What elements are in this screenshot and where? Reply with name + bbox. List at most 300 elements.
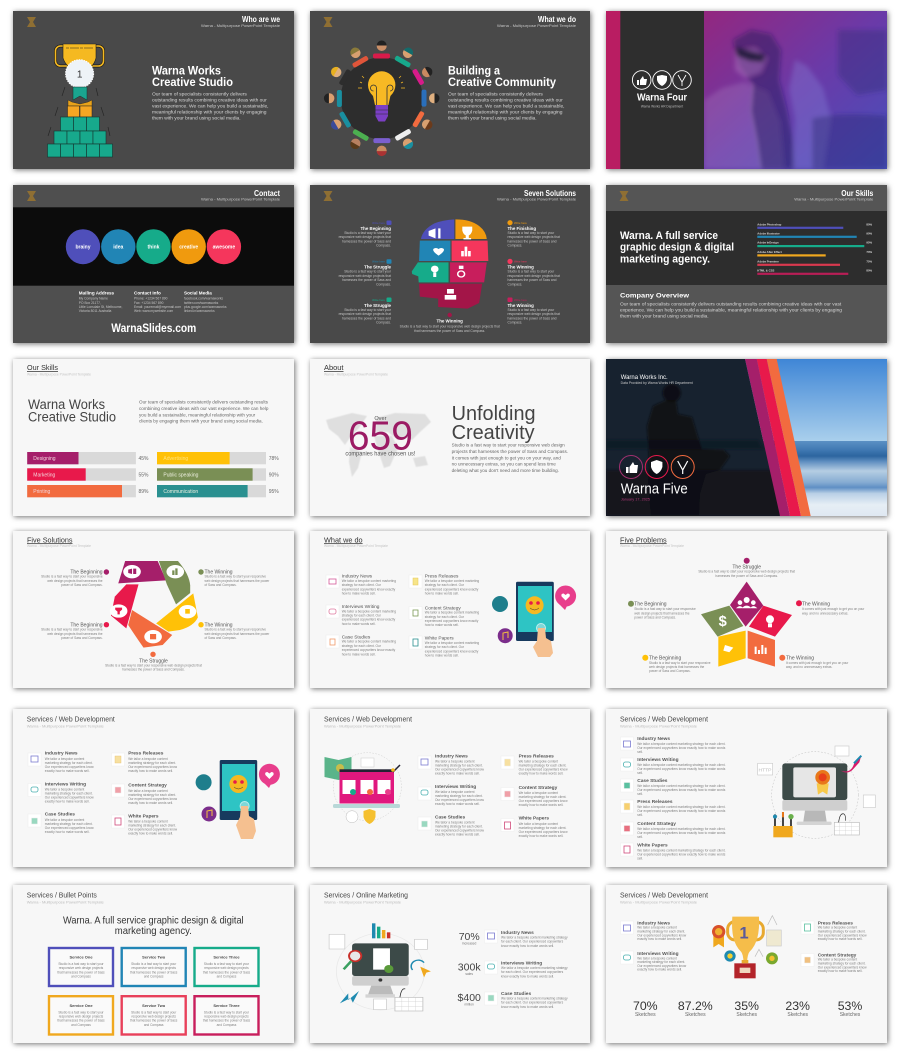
- labels: right column: harnesses the power of Sass and: [508, 278, 557, 282]
- service descriptions: We tailor a bespoke content: [45, 788, 84, 792]
- service descriptions: We tailor a bespoke content: [45, 757, 84, 761]
- service descriptions: exactly how to make words sell.: [818, 969, 863, 973]
- service box text: Studio is a fast way to start your: [204, 962, 250, 966]
- service titles: [435, 753, 558, 822]
- label: the winning bottom: The Winning: [786, 656, 814, 662]
- label: the winning right: [796, 600, 865, 615]
- heading: Contact: [254, 189, 280, 198]
- panel: about: [310, 359, 590, 516]
- label: the struggle: [698, 558, 795, 578]
- service box text: that harnesses the power of Sass: [130, 1019, 178, 1023]
- label: the beginning left: power of Sass and Compass.: [634, 615, 676, 619]
- service box titles: Service Three: [213, 1003, 240, 1008]
- service descriptions: We tailor a bespoke content: [818, 926, 857, 930]
- logo: [324, 191, 332, 201]
- subheading: Warna - Multipurpose PowerPoint Template: [201, 23, 280, 28]
- subheading: Warna - Multipurpose PowerPoint Template: [620, 544, 684, 548]
- icons: service squares: [484, 930, 498, 1005]
- column: contact info: [134, 290, 181, 313]
- service titles: White Papers: [128, 813, 159, 819]
- bar chart: right skills: [157, 452, 279, 497]
- service descriptions: We tailor a bespoke content: [128, 789, 168, 793]
- column: mailing address: Mailing Address: [79, 290, 115, 296]
- labels: left column: The Struggle: [364, 303, 392, 308]
- bar chart: software skills: 70%: [866, 250, 873, 254]
- service descriptions: marketing strategy for each client.: [435, 764, 483, 768]
- service descriptions: exactly how to make words sell.: [128, 832, 173, 836]
- service descriptions: We tailor a bespoke content marketing: [425, 611, 479, 615]
- service descriptions: marketing strategy for each client.: [435, 824, 483, 828]
- service boxes: [49, 948, 258, 1034]
- label: the struggle: The Struggle: [732, 564, 761, 570]
- panel: seven solutions: [310, 185, 590, 343]
- labels: left column: Studio is a fast way to start your: [344, 270, 392, 274]
- label: the beginning bottom: [642, 655, 711, 673]
- label: the beginning left: Studio is a fast way to start your responsive: [634, 607, 696, 611]
- bar chart: right skills: 78%: [269, 456, 279, 462]
- statement: Warna. A full service graphic design & digital: [63, 914, 244, 926]
- service box text: Studio is a fast way to start your: [58, 1010, 105, 1014]
- service items: Industry News: [501, 930, 534, 936]
- label: the winning bottom right: Studio is a fast way to start your responsive: [204, 628, 266, 632]
- bar chart: software skills: 95%: [866, 241, 873, 245]
- icons: service squares: [28, 753, 124, 828]
- service titles: Press Releases: [128, 751, 164, 757]
- body text: outstanding results combining creative ideas with our: [448, 98, 563, 104]
- service descriptions: We tailor a bespoke content: [519, 791, 558, 795]
- service descriptions: marketing strategy for each client.: [435, 794, 483, 798]
- service titles: Interviews Writing: [45, 781, 86, 787]
- label: the winning right: The Winning: [802, 601, 830, 607]
- service box text: and Compass: [144, 975, 164, 979]
- panel: our skills dark: [606, 185, 887, 343]
- illustration: phone with emoji: [492, 582, 576, 657]
- label: the struggle: The Struggle: [139, 658, 168, 664]
- column: social media: twitter.com/warnaworks: [184, 301, 219, 305]
- label: the winning top right: Studio is a fast way to start your responsive: [204, 575, 266, 579]
- body text: vast experience. We can help you build a sustainable,: [448, 104, 565, 110]
- description: you build a sustainable, meaningful relationship with your: [139, 412, 256, 417]
- service descriptions: We tailor a bespoke content marketing strategy for each client.: [637, 784, 726, 788]
- labels: left column: Compass.: [376, 321, 391, 325]
- statement: [63, 914, 244, 937]
- statement: marketing agency.: [620, 253, 710, 265]
- stats: 70%: [459, 931, 480, 943]
- stats: 300k: [458, 962, 481, 974]
- description: Our team of specialists consistently delivers outstanding results: [139, 400, 269, 405]
- column: contact info: Email: youremail@myemail.com: [134, 305, 181, 309]
- subheading: Warna - Multipurpose PowerPoint Template: [201, 197, 280, 202]
- service descriptions: marketing strategy for each client.: [45, 792, 93, 796]
- stats: 35%: [734, 999, 759, 1013]
- heading: Five Problems: [620, 535, 667, 544]
- service box text: Studio is a fast way to start your: [131, 962, 177, 966]
- bar chart: right skills: 95%: [269, 489, 279, 495]
- stats: 70%: [633, 999, 658, 1013]
- subheading: Warna - Multipurpose PowerPoint Template: [620, 900, 697, 904]
- body text: outstanding results combining creative ideas with our: [152, 98, 267, 104]
- icons: three circles: [620, 456, 694, 478]
- labels: right column: responsive web design projects that: [508, 274, 560, 278]
- panel: services online marketing: [310, 885, 590, 1043]
- illustration: monitor marketing: [329, 923, 431, 1011]
- illustration: laptop: [324, 753, 401, 824]
- service descriptions: marketing strategy for each client.: [637, 960, 685, 964]
- column: contact info: Fax: +1234 567 890: [134, 301, 164, 305]
- service titles: Content Strategy: [519, 785, 558, 791]
- service titles: Content Strategy: [128, 783, 167, 789]
- description: clients by engaging them with your brand using social media.: [139, 419, 263, 424]
- illustration: monitor: HTTP: [758, 767, 772, 773]
- label: the struggle: Studio is a fast way to start your responsive web design projects that: [698, 570, 795, 574]
- logo: [27, 191, 36, 201]
- overview text: them with your brand using social media.: [620, 313, 709, 319]
- label: the beginning top left: web design projects that harnesses the: [47, 579, 103, 583]
- bar chart: software skills: Adobe Illustrator: [757, 231, 781, 235]
- service descriptions: We tailor a bespoke content: [818, 958, 857, 962]
- circles: keywords: think: [148, 244, 160, 250]
- service descriptions: We tailor a bespoke content: [435, 820, 475, 824]
- panel: services laptop: [310, 709, 590, 867]
- logo: [324, 17, 332, 27]
- star diagram: $: [719, 614, 727, 630]
- service descriptions: We tailor a bespoke content: [435, 760, 475, 764]
- label: the winning bottom right: of Sass and Compass.: [204, 636, 237, 640]
- body text: them with your brand using social media.: [152, 116, 241, 122]
- service descriptions: We tailor a bespoke content marketing strategy for each client.: [637, 742, 726, 746]
- service descriptions: Our experienced copywriters know exactly how to make words: [637, 788, 726, 792]
- service box text: that harnesses the power of Sass: [130, 970, 178, 974]
- stat labels: Sketches: [635, 1012, 656, 1018]
- bar chart: right skills: Public speaking: [163, 472, 199, 478]
- website: WarnaSlides.com: [111, 321, 196, 335]
- service box text: and Compass: [217, 1023, 237, 1027]
- service titles: Industry News: [45, 751, 78, 757]
- service descriptions: how to make words sell.: [342, 622, 376, 626]
- panel: warna five: [606, 359, 887, 516]
- labels: right column: Write here: [514, 260, 527, 264]
- column: mailing address: Victoria 8011 Australia: [79, 309, 111, 313]
- heading: Services / Web Development: [27, 715, 116, 724]
- label: bottom: that harnesses the power of Sass and Compass.: [414, 329, 485, 333]
- service items: Press Releases: [425, 574, 459, 580]
- label: the beginning bottom left: power of Sass and Compass.: [61, 636, 103, 640]
- world map: [326, 413, 431, 477]
- column: mailing address: [79, 290, 123, 313]
- service items: Interviews Writing: [501, 961, 542, 967]
- service titles: [45, 751, 167, 819]
- service descriptions: [342, 579, 479, 658]
- service box text: responsive web design projects: [204, 966, 249, 970]
- service descriptions: exactly how to make words sell.: [128, 801, 173, 805]
- heading: Five Solutions: [27, 535, 73, 544]
- bar chart: software skills: Adobe Photoshop: [757, 222, 782, 226]
- labels: left column: Studio is a fast way to start your: [344, 308, 392, 312]
- label: the beginning bottom: web design projects that harnesses the: [649, 665, 705, 669]
- label: the beginning left: The Beginning: [634, 601, 667, 607]
- subtitle: Warna Works HR Department: [641, 104, 683, 108]
- description: no unnecessary extras, so you can spend less time: [452, 462, 556, 467]
- service box text: Studio is a fast way to start your: [204, 1010, 250, 1014]
- panel: services phone: [13, 709, 294, 867]
- service descriptions: Our experienced copywriters know exactly how to make words: [637, 831, 726, 835]
- service descriptions: sell.: [637, 750, 643, 754]
- service descriptions: Our experienced copywriters know: [45, 826, 94, 830]
- description: Studio is a fast way to start your responsive web design: [452, 443, 565, 448]
- subheading: Warna - Multipurpose PowerPoint Template: [497, 197, 576, 202]
- panel: warna four: [606, 11, 887, 169]
- stats: sales: [465, 972, 473, 976]
- service descriptions: marketing strategy for each client.: [128, 761, 176, 765]
- labels: right column: The Winning: [508, 303, 534, 308]
- panel: services monitor: [606, 709, 887, 867]
- service descriptions: [637, 742, 726, 860]
- service descriptions: know exactly how to make words sell.: [501, 974, 554, 978]
- service items: Case Studies: [342, 634, 371, 640]
- illustration: phone with emoji: [196, 760, 280, 839]
- service descriptions: exactly how to make words sell.: [435, 802, 480, 806]
- heading: Our Skills: [27, 363, 58, 372]
- headline: [452, 403, 536, 444]
- labels: right column: Studio is a fast way to start your: [508, 270, 555, 274]
- label: the winning bottom right: web design projects that harnesses the power: [204, 632, 270, 636]
- service descriptions: Our experienced copywriters know exactly how to make words: [637, 852, 726, 856]
- label: the beginning bottom left: [41, 622, 109, 640]
- bar chart: software skills: 80%: [866, 268, 873, 272]
- service descriptions: We tailor a bespoke content: [128, 820, 168, 824]
- subheading: Warna - Multipurpose PowerPoint Template: [324, 724, 401, 728]
- bar chart: left skills: 55%: [138, 472, 149, 478]
- label: the beginning top left: power of Sass and Compass.: [61, 583, 103, 587]
- service descriptions: We tailor a bespoke content: [435, 790, 475, 794]
- bar chart: left skills: Printing: [33, 489, 50, 495]
- service descriptions: Our experienced copywriters know: [128, 828, 178, 832]
- logo: [620, 191, 628, 201]
- service box text: Studio is a fast way to start your: [131, 1010, 177, 1014]
- magenta strip: [606, 11, 620, 169]
- title: Warna Four: [637, 93, 687, 104]
- label: bottom: The Winning: [437, 319, 463, 324]
- statement: graphic design & digital: [620, 242, 734, 254]
- service titles: Press Releases: [818, 920, 853, 926]
- stat: 659 companies: companies have chosen us!: [345, 452, 416, 458]
- service titles: Content Strategy: [637, 821, 676, 827]
- icon: trophy pyramid: 1: [77, 70, 83, 80]
- service descriptions: strategy for each client. Our: [342, 644, 382, 648]
- label: the beginning top left: The Beginning: [70, 569, 103, 575]
- label: the struggle: [105, 652, 202, 672]
- service descriptions: We tailor a bespoke content: [45, 818, 84, 822]
- service descriptions: for each client. Our experienced copywriters: [501, 1000, 564, 1004]
- circles: keywords: awesome: [213, 244, 235, 250]
- service descriptions: marketing strategy for each client.: [45, 822, 93, 826]
- service descriptions: exactly how to make words sell.: [637, 968, 682, 972]
- service titles: Case Studies: [435, 814, 465, 820]
- circles: keywords: idea: [113, 244, 124, 250]
- service box text: responsive web design projects: [59, 1014, 104, 1018]
- label: the beginning left: web design projects that harnesses the: [634, 611, 690, 615]
- bar chart: left skills: [27, 452, 149, 497]
- service descriptions: exactly how to make words sell.: [45, 769, 90, 773]
- service descriptions: Our experienced copywriters know: [435, 828, 485, 832]
- photo: silhouette: [606, 360, 780, 516]
- service descriptions: marketing strategy for each client.: [637, 930, 685, 934]
- service descriptions: We tailor a bespoke content marketing strategy: [501, 935, 568, 939]
- labels: right column: The Finishing: [508, 226, 536, 231]
- heading: warna works: Creative Studio: [152, 77, 233, 89]
- service icons: [418, 756, 514, 832]
- service descriptions: Our experienced copywriters know: [128, 797, 178, 801]
- service descriptions: Our experienced copywriters know exactly how to make words: [637, 767, 726, 771]
- service descriptions: marketing strategy for each client.: [818, 962, 866, 966]
- bar chart: software skills: Adobe After Effect: [757, 250, 782, 254]
- bar chart: software skills: Adobe Premiere: [757, 259, 779, 263]
- subtitle: Data Provided by Warna Works HR Department: [621, 381, 693, 385]
- panel: services bullet points: [13, 885, 294, 1043]
- labels: left column: The Beginning: [360, 226, 391, 231]
- heading: building a creative community: Building a: [448, 66, 501, 78]
- labels: left column: Studio is a fast way to start your: [344, 231, 392, 235]
- labels: right column: Compass.: [508, 321, 522, 325]
- service descriptions: Our experienced copywriters know: [45, 765, 94, 769]
- column: contact info: Contact Info: [134, 290, 161, 296]
- circles: keywords: brainy: [75, 244, 91, 250]
- service titles: Case Studies: [637, 778, 668, 784]
- heading: Who are we: [242, 15, 280, 24]
- service descriptions: Our experienced copywriters know: [818, 933, 867, 937]
- service descriptions: how to make words sell.: [425, 623, 459, 627]
- service descriptions: We tailor a bespoke content: [128, 757, 168, 761]
- labels: right column: responsive web design projects that: [508, 235, 560, 239]
- service titles: Press Releases: [637, 799, 673, 805]
- service descriptions: Our experienced copywriters know: [519, 768, 568, 772]
- stats: [458, 931, 481, 1006]
- label: the struggle: harnesses the power of Sass and Compass.: [715, 574, 778, 578]
- bar chart: software skills: 75%: [866, 259, 873, 263]
- photo with gradient: [704, 11, 887, 169]
- service box titles: Service One: [69, 1003, 93, 1008]
- heading: Services / Web Development: [620, 891, 709, 900]
- service descriptions: We tailor a bespoke content marketing strategy: [501, 996, 568, 1000]
- service descriptions: Our experienced copywriters know: [435, 768, 485, 772]
- service box text: and Compass: [217, 975, 237, 979]
- bar chart: software skills: 80%: [866, 222, 873, 226]
- service descriptions: Our experienced copywriters know: [818, 965, 867, 969]
- heading: warna works: [152, 66, 233, 89]
- labels: left column: harnesses the power of Sass and: [342, 278, 391, 282]
- service descriptions: strategy for each client. Our: [425, 645, 465, 649]
- service box text: that harnesses the power of Sass: [57, 970, 105, 974]
- label: the winning bottom right: [198, 622, 270, 640]
- heading: Services / Web Development: [324, 715, 413, 724]
- service titles: [637, 736, 679, 848]
- bar chart: right skills: Communication: [163, 489, 198, 495]
- service descriptions: strategy for each client. Our: [425, 615, 465, 619]
- label: the beginning bottom left: The Beginning: [70, 622, 103, 628]
- stats: million: [465, 1002, 474, 1006]
- label: the winning right: It comes with just enough to get you on your: [802, 607, 865, 611]
- service titles: White Papers: [637, 842, 668, 848]
- label: bottom: Studio is a fast way to start your responsive web design projects that: [400, 325, 500, 329]
- label: the winning top right: web design projects that harnesses the power: [204, 579, 270, 583]
- icon: community circle with bulb: [324, 40, 440, 156]
- service descriptions: sell.: [637, 835, 643, 839]
- labels: left column: Write here: [372, 221, 385, 225]
- subheading: Warna - Multipurpose PowerPoint Template: [324, 372, 388, 376]
- bar chart: software skills: 90%: [866, 231, 873, 235]
- statement: marketing agency.: [115, 925, 192, 937]
- service descriptions: We tailor a bespoke content marketing strategy for each client.: [637, 805, 726, 809]
- service items: White Papers: [425, 636, 454, 642]
- head diagram: [412, 219, 488, 309]
- panel: five solutions: [13, 531, 294, 688]
- heading: Seven Solutions: [524, 189, 576, 198]
- column: social media: plus.google.com/warnaworks: [184, 305, 227, 309]
- icons: service squares: [620, 737, 634, 856]
- service items: Case Studies: [501, 991, 531, 997]
- service descriptions: We tailor a bespoke content: [637, 956, 677, 960]
- service descriptions: We tailor a bespoke content marketing strategy: [501, 966, 568, 970]
- subheading: Warna - Multipurpose PowerPoint Template: [27, 544, 91, 548]
- panel: five problems: [606, 531, 887, 688]
- subheading: Warna - Multipurpose PowerPoint Template: [324, 900, 401, 904]
- heading: Services / Web Development: [620, 715, 709, 724]
- icon: trophy pyramid: [48, 44, 112, 157]
- service items: Content Strategy: [425, 605, 461, 611]
- service descriptions: know exactly how to make words sell.: [501, 1005, 554, 1009]
- subheading: Warna - Multipurpose PowerPoint Template: [324, 544, 388, 548]
- label: the winning bottom: It comes with just enough to get you on your: [786, 661, 849, 665]
- service descriptions: for each client. Our experienced copywriters: [501, 970, 564, 974]
- service descriptions: marketing strategy for each client.: [128, 793, 176, 797]
- service descriptions: exactly how to make words sell.: [519, 772, 564, 776]
- heading: Services / Online Marketing: [324, 891, 408, 900]
- service box text: responsive web design projects: [204, 1014, 249, 1018]
- subheading: Warna - Multipurpose PowerPoint Template: [620, 724, 697, 728]
- column: contact info: Phone: +1234 567 890: [134, 296, 168, 300]
- labels: left column: Write here: [372, 260, 385, 264]
- label: the winning top right: of Sass and Compass.: [204, 583, 237, 587]
- labels: left column: responsive web design projects that: [339, 235, 391, 239]
- service box text: that harnesses the power of Sass: [203, 970, 251, 974]
- service descriptions: marketing strategy for each client.: [45, 761, 93, 765]
- overview heading: Company Overview: [620, 293, 690, 300]
- panel: our skills light: [13, 359, 294, 516]
- icons: three circles: [632, 71, 691, 89]
- heading: building a creative community: [448, 66, 557, 89]
- service box text: and Compass: [71, 975, 91, 979]
- service descriptions: Our experienced copywriters know: [435, 798, 485, 802]
- heading: building a creative community: Creative Community: [448, 77, 557, 89]
- service descriptions: marketing strategy for each client.: [519, 795, 567, 799]
- service descriptions: Our experienced copywriters know: [45, 796, 94, 800]
- headline: Unfolding: [452, 403, 536, 425]
- label: the winning bottom: [779, 655, 849, 669]
- service descriptions: We tailor a bespoke content marketing: [425, 641, 479, 645]
- body text: Our team of specialists consistently delivers: [152, 92, 247, 98]
- description: combining creative ideas with our vast experience. We can help: [139, 406, 269, 411]
- stats: [633, 999, 862, 1013]
- service descriptions: experienced copywriters know exactly: [425, 649, 479, 653]
- service descriptions: We tailor a bespoke content marketing strategy for each client.: [637, 763, 726, 767]
- service descriptions: Our experienced copywriters know exactly how to make words: [637, 809, 726, 813]
- headline: Creativity: [452, 422, 535, 444]
- service titles: White Papers: [519, 816, 549, 822]
- column: mailing address: PO Box 21177,: [79, 301, 101, 305]
- stat labels: Sketches: [787, 1012, 808, 1018]
- stats: $400: [458, 992, 481, 1004]
- service descriptions: Our experienced copywriters know: [519, 830, 568, 834]
